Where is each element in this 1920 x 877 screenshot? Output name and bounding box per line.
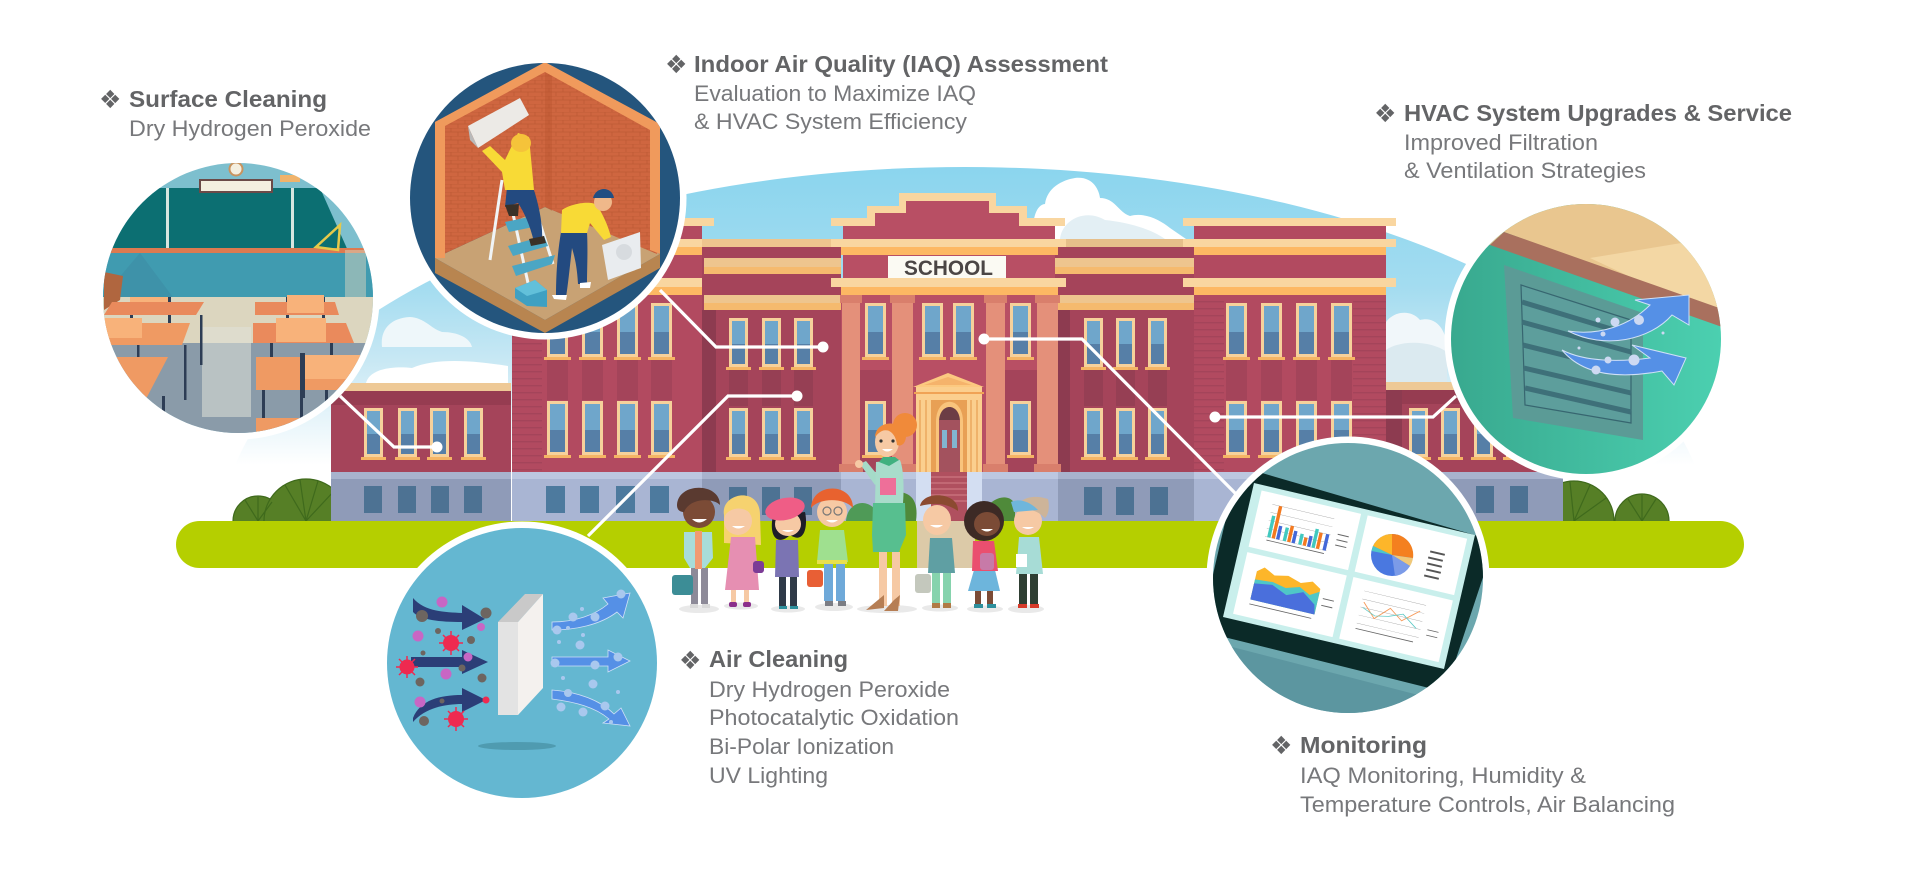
child 7 bbox=[1011, 497, 1049, 608]
text: air cleaning bbox=[679, 646, 959, 788]
circle: HVAC vent bbox=[1444, 198, 1730, 480]
text: HVAC upgrades: Improved Filtration bbox=[1404, 130, 1598, 155]
pie chart bbox=[1371, 534, 1445, 580]
bushes right bbox=[1563, 480, 1670, 521]
right inner wing bbox=[1055, 239, 1194, 521]
circle: air cleaning filter bbox=[380, 522, 665, 805]
columns bbox=[842, 295, 1058, 472]
text: monitoring: Monitoring bbox=[1300, 732, 1427, 758]
text: IAQ assessment: ❖ bbox=[665, 50, 687, 79]
text: surface cleaning bbox=[99, 85, 371, 141]
left inner wing bbox=[702, 239, 841, 521]
walkway patch bbox=[917, 521, 975, 568]
circle: IAQ assessment room bbox=[404, 56, 686, 340]
hedges behind teacher and children bbox=[846, 492, 1015, 521]
text: HVAC upgrades: ❖ bbox=[1374, 99, 1396, 128]
entrance portico bbox=[913, 373, 984, 472]
text: air cleaning: ❖ bbox=[679, 646, 701, 675]
central tower bbox=[831, 193, 1066, 521]
screen bbox=[1223, 483, 1475, 669]
text: air cleaning: UV Lighting bbox=[709, 763, 828, 788]
ground shadows bbox=[679, 602, 1044, 613]
text: air cleaning: Air Cleaning bbox=[709, 646, 848, 672]
far left wing bbox=[331, 383, 511, 521]
area chart bbox=[1249, 568, 1334, 619]
school building bbox=[331, 193, 1565, 521]
child 4 bbox=[807, 488, 853, 606]
child 3 bbox=[763, 494, 807, 609]
text: HVAC upgrades bbox=[1374, 99, 1792, 183]
steps and plinth bbox=[841, 472, 1058, 521]
text: IAQ assessment: Evaluation to Maximize IAQ bbox=[694, 81, 976, 106]
clouds bbox=[366, 178, 1447, 383]
circle: surface cleaning classroom bbox=[96, 156, 380, 440]
text: surface cleaning: Dry Hydrogen Peroxide bbox=[129, 116, 371, 141]
toolbox bbox=[515, 280, 547, 307]
text: IAQ assessment bbox=[665, 50, 1108, 134]
ladder bbox=[490, 170, 553, 283]
far right wing bbox=[1386, 382, 1565, 521]
text: air cleaning: Bi-Polar Ionization bbox=[709, 734, 894, 759]
text: monitoring bbox=[1270, 731, 1675, 817]
teacher bbox=[855, 413, 917, 611]
text: HVAC upgrades: HVAC System Upgrades & Service bbox=[1404, 100, 1792, 126]
text: monitoring: IAQ Monitoring, Humidity & bbox=[1300, 763, 1586, 788]
text: IAQ assessment: & HVAC System Efficiency bbox=[694, 109, 968, 134]
connector lines bbox=[340, 290, 1456, 536]
circle: monitoring tablet bbox=[1200, 436, 1495, 720]
text: surface cleaning: ❖ bbox=[99, 85, 121, 114]
right block bbox=[1183, 218, 1396, 521]
worker at outdoor unit bbox=[556, 232, 587, 297]
AC unit bbox=[468, 98, 529, 148]
child 1 bbox=[672, 488, 720, 608]
child 5 bbox=[915, 495, 958, 608]
line chart bbox=[1356, 590, 1438, 642]
text: surface cleaning: Surface Cleaning bbox=[129, 86, 327, 112]
teacher and children group bbox=[672, 413, 1049, 613]
text: air cleaning: Photocatalytic Oxidation bbox=[709, 705, 959, 730]
left block bbox=[500, 218, 714, 521]
bushes left bbox=[232, 478, 331, 521]
bar chart bbox=[1265, 504, 1349, 554]
text: monitoring: Temperature Controls, Air Balancing bbox=[1300, 792, 1675, 817]
text: monitoring: ❖ bbox=[1270, 731, 1292, 760]
text: HVAC upgrades: & Ventilation Strategies bbox=[1404, 158, 1646, 183]
child 6 bbox=[964, 501, 1004, 608]
worker on ladder bbox=[505, 187, 542, 242]
sign text: SCHOOL bbox=[904, 257, 993, 280]
outdoor unit bbox=[602, 232, 641, 280]
text: air cleaning: Dry Hydrogen Peroxide bbox=[709, 677, 950, 702]
connector dots bbox=[432, 334, 1220, 452]
sign bbox=[888, 256, 1006, 278]
sky dome bbox=[243, 167, 1688, 450]
child 2 bbox=[724, 495, 764, 607]
text: IAQ assessment: Indoor Air Quality (IAQ) Assessment bbox=[694, 51, 1108, 77]
ground bar bbox=[176, 521, 1744, 568]
